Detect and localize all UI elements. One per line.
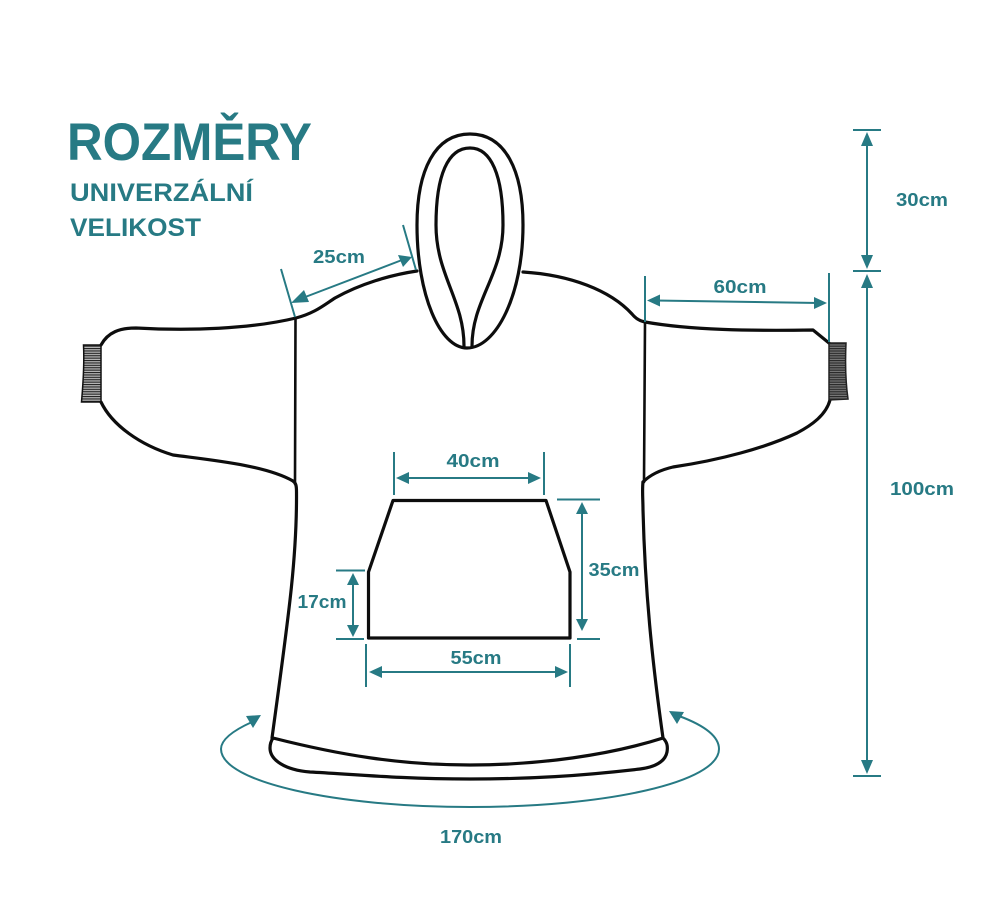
dimension: sleeve 60cm bbox=[645, 273, 829, 342]
left arm underside bbox=[101, 402, 293, 481]
hoodie outline bbox=[101, 134, 830, 779]
dimension: pocket bottom 55cm: 55cm bbox=[450, 648, 502, 668]
subtitle: VELIKOST bbox=[70, 214, 201, 242]
dimension: pocket height 35cm bbox=[557, 500, 640, 639]
dimension: shoulder 25cm bbox=[281, 225, 416, 317]
subtitle: UNIVERZÁLNÍ bbox=[70, 178, 254, 207]
hood outer bbox=[417, 134, 523, 348]
right armhole seam bbox=[644, 322, 645, 482]
icon: right cuff bbox=[829, 343, 848, 400]
dimension: shoulder 25cm: 25cm bbox=[313, 247, 365, 267]
dimension: hem circumference 170cm: 170cm bbox=[440, 827, 502, 847]
right shoulder and arm bbox=[523, 272, 829, 343]
dimension: pocket height 35cm: 35cm bbox=[588, 560, 640, 580]
dimension: pocket top 40cm: 40cm bbox=[446, 451, 500, 471]
dimension: pocket side 17cm bbox=[298, 570, 365, 639]
dimension: pocket top 40cm bbox=[394, 451, 544, 495]
dimension: pocket side 17cm: 17cm bbox=[298, 592, 346, 612]
dimension: body height 100cm: 100cm bbox=[890, 479, 954, 499]
dimension: hem circumference 170cm bbox=[221, 711, 719, 847]
pocket bbox=[368, 500, 570, 638]
left body side bbox=[272, 481, 297, 738]
icon: left cuff bbox=[82, 345, 101, 402]
dimension: pocket bottom 55cm bbox=[366, 644, 570, 687]
title: ROZMĚRY bbox=[67, 111, 312, 172]
right arm underside bbox=[643, 400, 830, 482]
right body side bbox=[643, 482, 663, 738]
left armhole seam bbox=[294, 318, 297, 482]
dimension: hood height 30cm: 30cm bbox=[896, 190, 948, 210]
dimension: body height 100cm bbox=[853, 274, 954, 776]
left arm and shoulder bbox=[101, 271, 417, 345]
subtitle bbox=[70, 178, 254, 242]
hem bbox=[270, 738, 667, 779]
dimension: hood height 30cm bbox=[853, 130, 948, 271]
hood inner bbox=[436, 148, 503, 346]
dimension: sleeve 60cm: 60cm bbox=[714, 277, 766, 297]
